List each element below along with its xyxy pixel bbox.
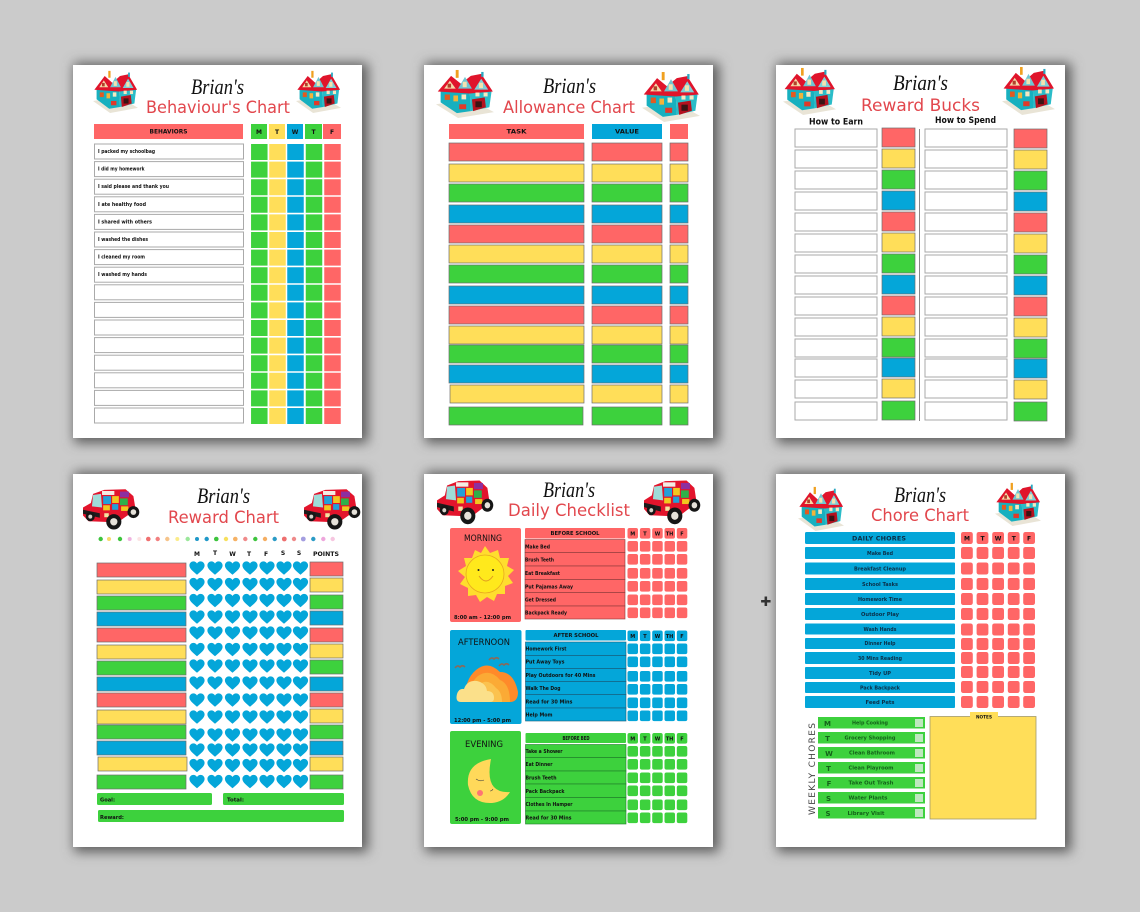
icon: toy truck right [644, 480, 700, 524]
daily chores list: Wash Hands [864, 627, 896, 633]
daily chores list: School Tasks [862, 582, 898, 588]
behaviour rows: I washed the dishes [98, 237, 148, 243]
weekday headers: W [292, 129, 299, 136]
weekday column labels: POINTS [313, 551, 339, 558]
daily tick grid: T [980, 536, 985, 542]
before bed list [526, 733, 626, 824]
weekday headers [251, 124, 341, 139]
afternoon card: AFTERNOON [458, 638, 510, 648]
icon: toy house right [1002, 67, 1055, 115]
icon: toy truck left [437, 480, 493, 524]
afternoon tick grid: TH [666, 634, 673, 640]
evening tick grid: TH [666, 736, 673, 742]
before school list: Get Dressed [525, 598, 556, 604]
after school list: Walk The Dog [526, 686, 561, 692]
daily chores list [805, 532, 955, 708]
evening tick grid [628, 733, 687, 823]
afternoon tick grid: W [655, 634, 661, 640]
before school list: Backpack Ready [525, 610, 567, 616]
page shadows [74, 63, 1071, 852]
weekly chores list: Grocery Shopping [844, 736, 896, 742]
morning tick grid: W [655, 532, 661, 538]
weekday column labels: M [194, 551, 200, 558]
heading: Allowance Chart: Allowance Chart [503, 98, 635, 118]
morning card: MORNING [464, 534, 502, 544]
daily chores list: Breakfast Cleanup [854, 566, 906, 572]
before bed list: Eat Dinner [526, 762, 553, 768]
weekly chores list: Water Plants [848, 796, 888, 802]
task colour bars [97, 563, 187, 789]
before school list: Eat Breakfast [525, 571, 560, 577]
after school list: Read for 30 Mins [526, 700, 572, 706]
after school list: Play Outdoors for 40 Mins [526, 673, 596, 679]
icon: toy house right [995, 483, 1041, 526]
icon: toy house left [436, 70, 494, 118]
heading: Daily Checklist: Daily Checklist [508, 501, 630, 521]
weekly chores list: Clean Playroom [848, 766, 894, 772]
notes box: NOTES [976, 714, 992, 720]
behaviour rows: I washed my hands [98, 272, 147, 278]
table headers: VALUE [615, 128, 639, 136]
weekday column labels: T [213, 550, 218, 557]
evening tick grid: F [680, 736, 684, 742]
daily chores list: Tidy UP [869, 671, 891, 677]
daily chores list: Feed Pets [866, 700, 894, 706]
table headers: TASK [506, 128, 527, 136]
evening card: 5:00 pm - 9:00 pm [455, 817, 509, 823]
icon: toy house right [642, 72, 700, 122]
morning card: 8:00 am - 12:00 pm [454, 615, 511, 621]
weekday column labels: T [247, 551, 252, 558]
behaviour rows [94, 144, 244, 423]
afternoon tick grid: F [680, 634, 684, 640]
icon: sleeping moon [468, 759, 510, 803]
icon: toy house left [798, 487, 844, 531]
afternoon tick grid [628, 630, 687, 721]
after school list: Homework First [526, 646, 567, 652]
icon: toy truck right [304, 489, 360, 529]
subheading: How to Earn: How to Earn [809, 118, 863, 128]
daily tick grid [961, 532, 1035, 708]
weekly chores list: S [825, 810, 831, 818]
icon: toy house right [296, 71, 341, 113]
heading: Reward Chart: Reward Chart [168, 508, 279, 528]
morning card [450, 528, 521, 622]
daily chores list: Dinner Help [864, 641, 896, 647]
behaviour rows: I ate healthy food [98, 202, 146, 208]
weekly chores list: M [824, 720, 831, 728]
value colour boxes [882, 128, 1047, 421]
after school list: Put Away Toys [526, 660, 564, 666]
morning tick grid: F [680, 532, 684, 538]
morning tick grid: T [643, 532, 647, 538]
after school list: Help Mom [526, 712, 553, 718]
daily tick grid: T [1012, 536, 1017, 542]
heart tracker grid [189, 561, 308, 788]
panel: daily checklist page [424, 474, 713, 847]
daily chores list: DAILY CHORES [852, 534, 906, 542]
before school list: BEFORE SCHOOL [550, 531, 600, 537]
daily tick grid: W [995, 536, 1002, 542]
panel: reward chart page [73, 474, 362, 847]
after school list: AFTER SCHOOL [554, 633, 599, 639]
allowance rows [449, 143, 688, 425]
panel: allowance chart page [424, 65, 713, 438]
evening tick grid: T [643, 736, 647, 742]
before bed list: BEFORE BED [562, 736, 590, 742]
heading: Brian's: Brian's [543, 73, 596, 98]
evening tick grid: M [630, 736, 635, 742]
behaviour rows: I did my homework [98, 167, 145, 173]
subheading: How to Spend: How to Spend [935, 116, 996, 126]
afternoon tick grid: M [630, 634, 635, 640]
daily chores list: Homework Time [858, 597, 902, 603]
weekday headers: M [256, 129, 262, 136]
icon: plus sign: ✚ [761, 595, 772, 610]
goal field: Goal: [100, 798, 115, 804]
before school list: Brush Teeth [525, 558, 554, 564]
before school list: Put Pajamas Away [525, 584, 573, 590]
before bed list: Pack Backpack [526, 789, 565, 795]
points colour boxes [310, 562, 343, 789]
heading: Brian's: Brian's [543, 477, 595, 502]
morning tick grid: TH [666, 532, 673, 538]
weekly chores list: T [825, 735, 830, 743]
weekly chores list: S [826, 795, 831, 803]
weekly chores list: Help Cooking [852, 720, 888, 726]
earn and spend entry boxes [795, 129, 1007, 421]
weekly chores list: F [827, 780, 832, 788]
reward field [98, 810, 344, 822]
goal field [97, 793, 212, 805]
icon: sunset clouds [455, 658, 518, 702]
before bed list: Clothes In Hamper [526, 802, 573, 808]
daily chores list: Make Bed [867, 551, 893, 557]
before school list: Make Bed [525, 544, 550, 550]
icon: sun [458, 546, 514, 602]
weekly chores list: Take Out Trash [848, 780, 894, 786]
weekly chores list: Library Visit [848, 811, 885, 817]
daily tick grid: M [964, 536, 970, 542]
total field [223, 793, 344, 805]
heading: Brian's: Brian's [894, 482, 946, 507]
weekday column labels: F [264, 551, 268, 558]
notes box [930, 712, 1036, 819]
daily chores list: Outdoor Play [861, 612, 899, 618]
morning tick grid: M [630, 532, 635, 538]
heading: Brian's: Brian's [893, 70, 948, 95]
after school list [526, 630, 626, 721]
before bed list: Brush Teeth [526, 776, 557, 782]
heading: Reward Bucks: Reward Bucks [861, 96, 980, 116]
table header: behaviors [94, 124, 243, 139]
icon: toy truck left [83, 489, 139, 529]
behaviour rows: I said please and thank you [98, 184, 169, 190]
label: weekly chores: WEEKLY CHORES [808, 723, 818, 815]
afternoon card: 12:00 pm - 5:00 pm [454, 718, 511, 724]
panel: reward bucks page [776, 65, 1065, 438]
morning tick grid [628, 528, 687, 618]
weekly chores list: W [825, 750, 833, 758]
weekday headers: F [330, 129, 334, 136]
weekday tick columns [259, 144, 332, 424]
daily chores list: Pack Backpack [860, 686, 900, 692]
behaviour rows: I shared with others [98, 219, 152, 225]
daily chores list: 30 Mins Reading [858, 656, 902, 662]
before school list [525, 528, 625, 619]
before bed list: Read for 30 Mins [526, 816, 572, 822]
weekly chores list [818, 717, 925, 818]
total field: Total: [227, 798, 244, 804]
heading: Brian's: Brian's [197, 483, 250, 508]
weekly chores list: Clean Bathroom [849, 750, 895, 756]
table headers [449, 124, 688, 139]
afternoon card [450, 630, 522, 724]
behaviour rows: I cleaned my room [98, 255, 145, 261]
icon: toy house left [783, 68, 836, 115]
weekday column labels: S [281, 550, 285, 557]
heading: Brian's: Brian's [191, 74, 244, 99]
weekday column labels: W [229, 551, 236, 558]
icon: toy house left [93, 71, 138, 113]
panel: behaviour chart page [73, 65, 362, 438]
evening card [450, 731, 521, 824]
heading: Behaviour's Chart: Behaviour's Chart [146, 98, 290, 118]
behaviour rows: I packed my schoolbag [98, 149, 155, 155]
table header: behaviors: BEHAVIORS [150, 128, 188, 136]
decorative dotted line [98, 537, 335, 541]
daily tick grid: F [1027, 536, 1031, 542]
heading: Chore Chart: Chore Chart [871, 506, 969, 526]
panel: chore chart page [776, 474, 1065, 847]
evening tick grid: W [655, 736, 661, 742]
weekday column labels: S [297, 550, 301, 557]
afternoon tick grid: T [643, 634, 647, 640]
evening card: EVENING [465, 740, 503, 750]
reward field: Reward: [100, 815, 124, 821]
weekday headers: T [311, 129, 316, 136]
weekday column labels [194, 550, 339, 558]
weekly chores list: T [826, 765, 831, 773]
weekday headers: T [275, 129, 280, 136]
before bed list: Take a Shower [526, 749, 563, 755]
